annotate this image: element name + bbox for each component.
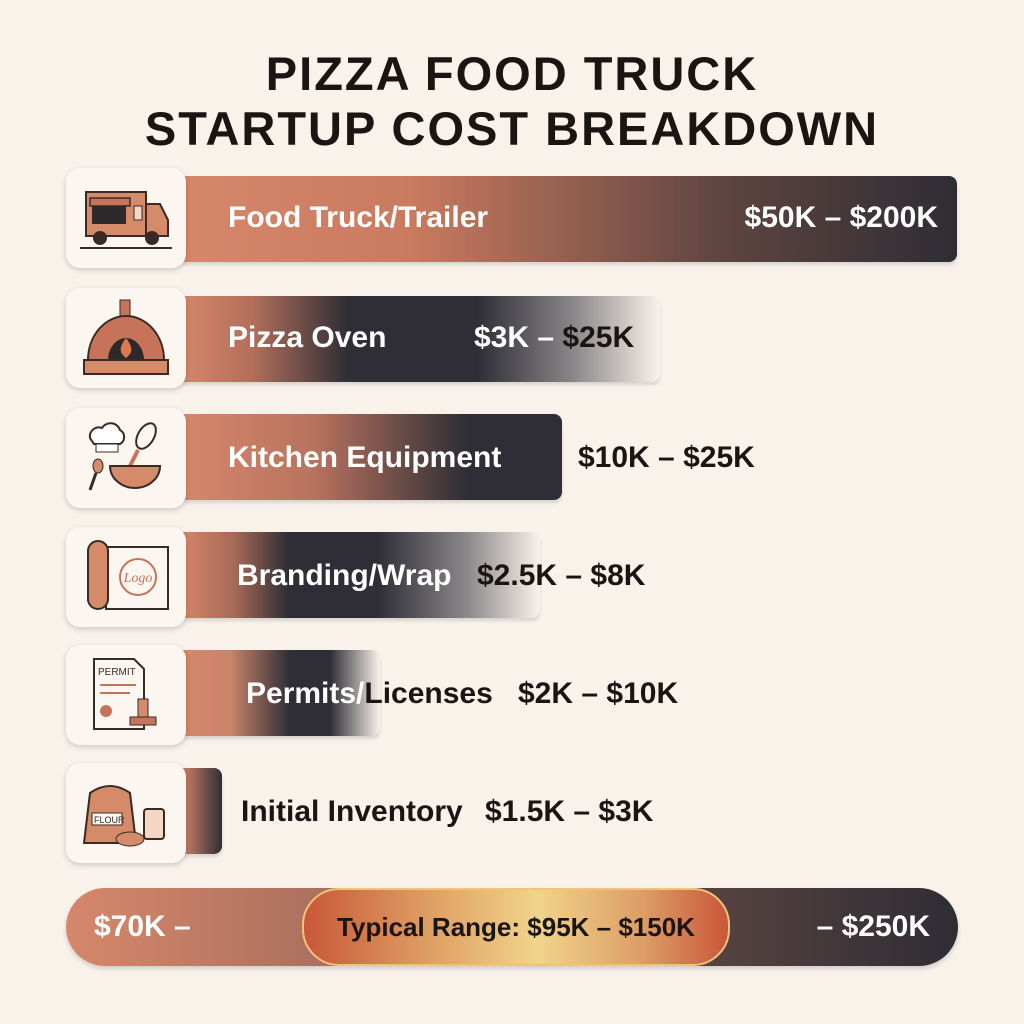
icon: flour: FLOUR [94, 815, 125, 825]
total range bar [66, 888, 958, 966]
icon: permit: PERMIT [98, 667, 136, 678]
value: $3K – $25K [474, 321, 634, 354]
bar: inventory [180, 768, 222, 854]
row: kitchen equipment [64, 408, 755, 512]
title [145, 47, 879, 155]
icon: food truck [66, 168, 186, 268]
bar: branding [180, 532, 540, 618]
bar: food truck [180, 176, 957, 262]
icon: kitchen tools [66, 408, 186, 508]
value: $1.5K – $3K [485, 795, 653, 828]
value: $2K – $10K [518, 677, 678, 710]
icon: logo wrap [66, 527, 186, 627]
bar: pizza oven [180, 296, 660, 382]
typical range pill: Typical Range: $95K – $150K [337, 912, 695, 942]
row: food truck [64, 168, 958, 272]
row: branding [64, 526, 646, 632]
value: $50K – $200K [745, 201, 938, 234]
icon: permit [66, 645, 186, 745]
label: Initial Inventory [241, 795, 463, 828]
title: PIZZA FOOD TRUCK [266, 47, 758, 100]
row: pizza oven [64, 288, 661, 392]
typical range pill [302, 888, 730, 966]
icon: pizza oven [66, 288, 186, 388]
label: Permits/Licenses [246, 677, 493, 710]
bar: permits [180, 650, 380, 736]
icon: logo wrap: Logo [123, 571, 152, 586]
max value: – $250K [817, 910, 930, 943]
row: inventory [64, 762, 654, 868]
label: Food Truck/Trailer [228, 201, 488, 234]
row: permits [64, 644, 678, 750]
value: $2.5K – $8K [477, 559, 645, 592]
title: STARTUP COST BREAKDOWN [145, 102, 879, 155]
value: $10K – $25K [578, 441, 755, 474]
label: Kitchen Equipment [228, 441, 501, 474]
bar: kitchen equipment [180, 414, 562, 500]
label: Pizza Oven [228, 321, 386, 354]
label: Branding/Wrap [237, 559, 451, 592]
min value: $70K – [94, 910, 191, 943]
icon: flour [66, 763, 186, 863]
